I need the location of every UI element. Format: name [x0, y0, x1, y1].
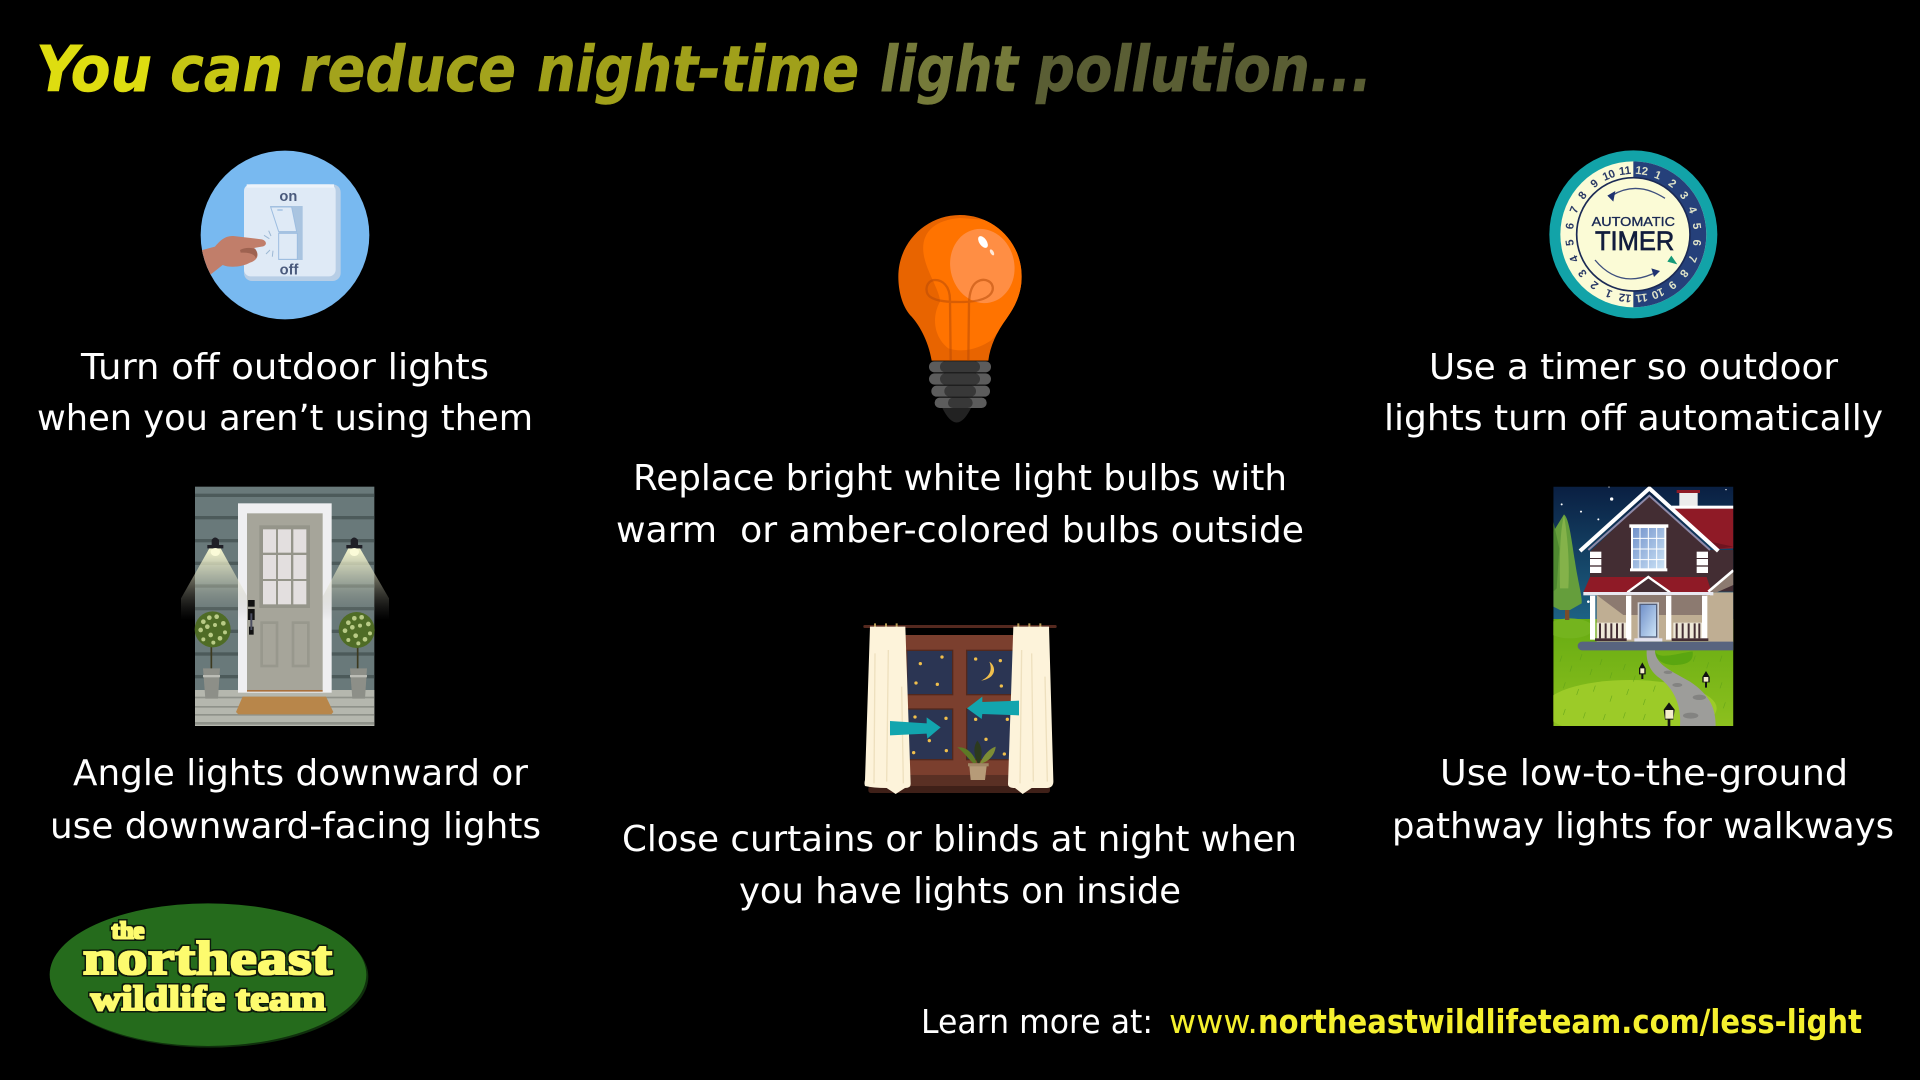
icon: light switch: on — [279, 189, 297, 205]
icon: automatic timer dial: AUTOMATIC — [1592, 214, 1675, 229]
icon: automatic timer dial: 11 — [1618, 165, 1632, 178]
icon: automatic timer dial: 2 — [1666, 177, 1678, 191]
logo: the northeast wildlife team: northeast — [83, 933, 333, 985]
icon: automatic timer dial: 9 — [1589, 177, 1601, 191]
text: pathway lights — [1392, 753, 1894, 847]
text: angle lights: Angle lights downward or — [73, 753, 528, 794]
learn more link: Learn more at: — [921, 1002, 1153, 1041]
title: You — [36, 33, 152, 106]
logo: the northeast wildlife team: the — [112, 919, 145, 945]
text: close curtains — [622, 819, 1297, 912]
text: angle lights: use downward-facing lights — [50, 806, 541, 847]
icon: automatic timer dial: 9 — [1666, 278, 1678, 291]
title: light — [880, 33, 1020, 106]
text: close curtains: Close curtains or blinds at night when — [622, 819, 1297, 860]
icon: automatic timer dial — [1549, 150, 1717, 318]
text: turn off lights: Turn off outdoor lights — [80, 347, 489, 388]
text: replace bulbs: Replace bright white light bulbs with — [633, 458, 1287, 499]
icon: automatic timer dial: 8 — [1576, 190, 1590, 202]
icon: window with curtains closing — [863, 623, 1057, 794]
icon: automatic timer dial: 4 — [1568, 253, 1582, 264]
icon: automatic timer dial: 10 — [1649, 285, 1666, 301]
icon: light switch — [200, 151, 369, 319]
icon: automatic timer dial: 11 — [1635, 290, 1648, 304]
icon: automatic timer dial: 8 — [1677, 267, 1690, 279]
icon: automatic timer dial: 10 — [1601, 168, 1617, 184]
text: pathway lights: Use low-to-the-ground — [1440, 753, 1848, 794]
icon: light switch: off — [280, 262, 298, 278]
text: angle lights — [50, 753, 541, 847]
text: replace bulbs — [616, 458, 1304, 551]
logo: the northeast wildlife team — [50, 903, 368, 1048]
title: can — [170, 33, 283, 106]
text: timer: lights turn off automatically — [1384, 398, 1883, 439]
text: turn off lights — [37, 347, 533, 439]
icon: automatic timer dial: 3 — [1677, 190, 1690, 202]
text: timer — [1384, 347, 1883, 439]
text: timer: Use a timer so outdoor — [1429, 347, 1838, 388]
icon: automatic timer dial: TIMER — [1595, 226, 1674, 256]
icon: automatic timer dial: 7 — [1568, 205, 1582, 215]
text: pathway lights: pathway lights for walkways — [1392, 806, 1894, 847]
icon: front door with downward lights — [181, 487, 389, 726]
icon: automatic timer dial: 2 — [1589, 278, 1601, 291]
icon: automatic timer dial: 5 — [1690, 222, 1702, 230]
learn more link — [921, 1002, 1862, 1041]
title — [36, 33, 1372, 106]
text: replace bulbs: warm or amber-colored bulbs outside — [616, 510, 1304, 551]
icon: house with pathway lights — [1553, 486, 1734, 726]
icon: automatic timer dial: 12 — [1618, 290, 1632, 304]
icon: automatic timer dial: 4 — [1685, 205, 1699, 216]
text: turn off lights: when you aren’t using them — [37, 398, 533, 439]
icon: automatic timer dial: 12 — [1635, 165, 1649, 178]
icon: amber light bulb — [898, 215, 1033, 422]
title: reduce — [300, 33, 516, 106]
learn more link: www. — [1169, 1002, 1258, 1041]
text: close curtains: you have lights on inside — [739, 871, 1181, 912]
icon: automatic timer dial: 6 — [1564, 222, 1577, 230]
logo: the northeast wildlife team: wildlife team — [90, 979, 326, 1018]
title: pollution... — [1035, 33, 1372, 106]
icon: automatic timer dial: 1 — [1604, 286, 1614, 300]
icon: automatic timer dial: 6 — [1690, 239, 1702, 247]
title: night-time — [537, 33, 859, 106]
icon: automatic timer dial: 5 — [1564, 239, 1577, 247]
icon: automatic timer dial: 1 — [1652, 169, 1663, 183]
icon: automatic timer dial: 3 — [1576, 267, 1590, 279]
icon: automatic timer dial: 7 — [1685, 253, 1699, 264]
